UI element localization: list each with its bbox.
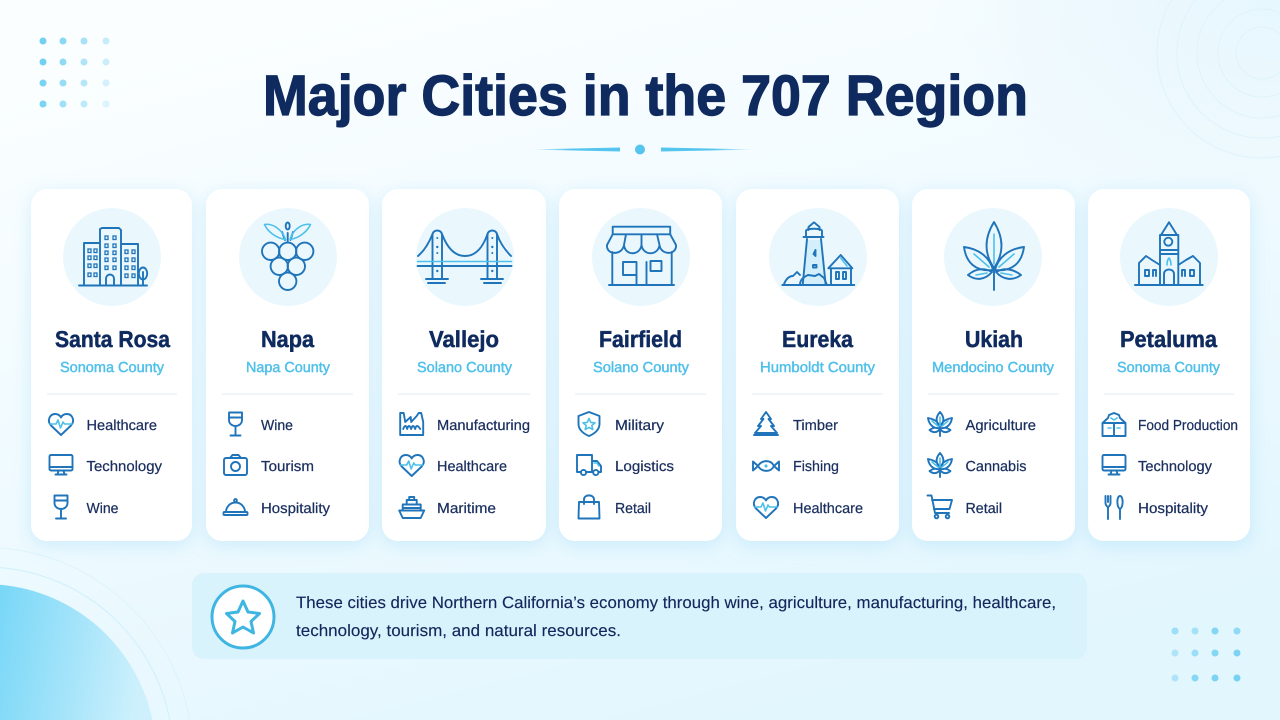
callout text: technology, tourism, and natural resources. (296, 622, 621, 640)
county: Mendocino County (932, 360, 1055, 376)
icon: suspension bridge (416, 208, 514, 306)
industry: Technology (50, 455, 163, 475)
icon: storefront (592, 208, 690, 306)
panel: Fairfield (559, 189, 722, 541)
industry: Agriculture (928, 412, 1036, 436)
panel: Vallejo (382, 189, 546, 541)
industry: Retail: Retail (615, 501, 651, 517)
industry: Healthcare: Healthcare (793, 501, 863, 517)
icon: city buildings (63, 208, 161, 306)
panel: Napa (206, 189, 369, 541)
panel: Santa Rosa (31, 189, 192, 541)
icon: clock tower hall (1120, 208, 1218, 306)
city name: Fairfield (599, 326, 682, 352)
industry: Timber (754, 412, 838, 435)
industry: Agriculture: Agriculture (966, 418, 1036, 434)
panel: Petaluma (1088, 189, 1250, 541)
city name: Santa Rosa (55, 326, 170, 352)
callout text: These cities drive Northern California’s economy through wine, agriculture, manufacturing, healthcare, (296, 594, 1056, 612)
industry: Hospitality (224, 499, 331, 517)
industry: Healthcare (49, 414, 157, 435)
industry: Cannabis: Cannabis (966, 459, 1026, 475)
industry: Food Production (1102, 413, 1238, 436)
industry: Hospitality: Hospitality (1138, 501, 1209, 517)
industry: Technology (1102, 455, 1213, 475)
decorative rings: top right (1157, 0, 1280, 158)
county: Solano County (593, 360, 690, 376)
industry: Wine (229, 412, 293, 436)
industry: Retail (928, 496, 1002, 518)
industry: Fishing: Fishing (793, 459, 839, 475)
panel: Eureka (736, 189, 899, 541)
icon: leaf (944, 208, 1042, 306)
panel: Ukiah (912, 189, 1075, 541)
title: Major Cities in the 707 Region (263, 64, 1028, 128)
industry: Healthcare: Healthcare (437, 459, 507, 475)
industry: Fishing (753, 459, 839, 475)
industry: Retail: Retail (966, 501, 1002, 517)
industry: Tourism: Tourism (261, 459, 314, 475)
icon: star badge (212, 586, 274, 648)
industry: Retail (578, 495, 651, 518)
industry: Maritime (399, 497, 496, 518)
city name: Petaluma (1120, 326, 1217, 352)
industry: Healthcare: Healthcare (86, 418, 157, 434)
callout (192, 573, 1087, 659)
industry: Healthcare (754, 497, 863, 518)
industry: Wine: Wine (261, 418, 293, 434)
decorative blob: bottom left (0, 548, 190, 720)
industry: Manufacturing (400, 413, 530, 435)
county: Solano County (417, 360, 513, 376)
industry: Wine (54, 496, 118, 518)
industry: Logistics (577, 455, 674, 475)
city name: Napa (261, 326, 314, 352)
county: Napa County (246, 360, 331, 376)
industry: Cannabis (928, 453, 1026, 477)
city name: Eureka (782, 326, 853, 352)
industry: Food Production: Food Production (1138, 418, 1238, 434)
industry: Military (578, 412, 665, 436)
city name: Ukiah (965, 326, 1023, 352)
dot grid: bottom right (1172, 628, 1240, 682)
title divider (528, 144, 757, 154)
county: Humboldt County (760, 360, 876, 376)
industry: Tourism (224, 455, 314, 475)
industry: Healthcare (400, 455, 507, 476)
industry: Manufacturing: Manufacturing (437, 418, 530, 434)
county: Sonoma County (1117, 360, 1221, 376)
callout text (296, 594, 1056, 640)
industry: Logistics: Logistics (615, 459, 674, 475)
city name: Vallejo (429, 326, 499, 352)
industry: Military: Military (615, 418, 665, 434)
industry: Maritime: Maritime (437, 501, 496, 517)
industry: Timber: Timber (793, 418, 838, 434)
dot grid: top left (40, 38, 110, 108)
county: Sonoma County (60, 360, 165, 376)
industry: Technology: Technology (86, 459, 163, 475)
industry: Hospitality (1106, 496, 1209, 519)
icon: lighthouse and cottage (769, 208, 867, 306)
industry: Wine: Wine (86, 501, 118, 517)
industry: Hospitality: Hospitality (261, 501, 331, 517)
industry: Technology: Technology (1138, 459, 1213, 475)
icon: grapes (239, 208, 337, 306)
